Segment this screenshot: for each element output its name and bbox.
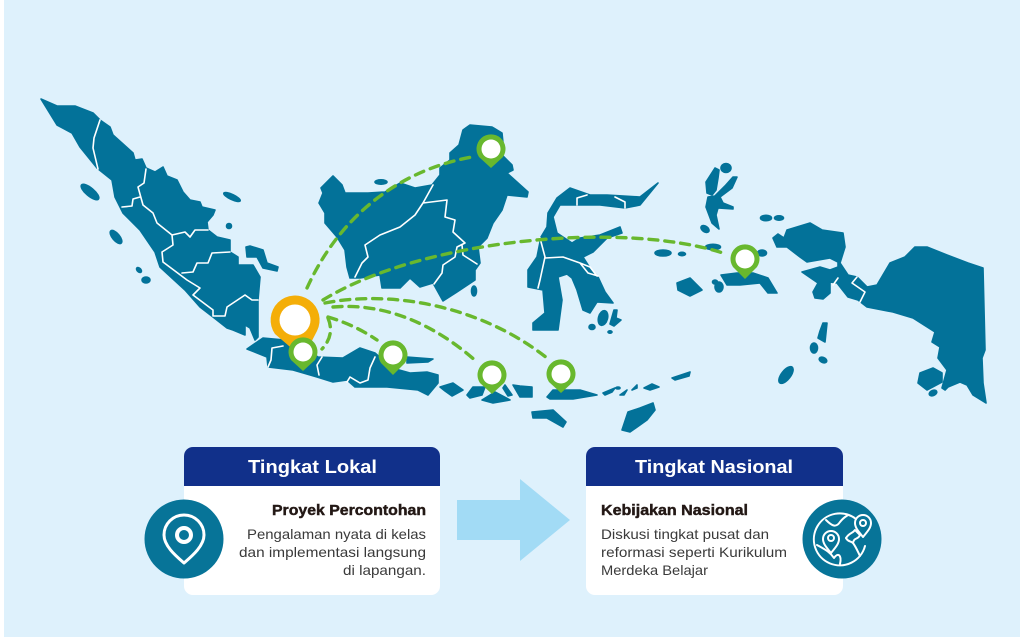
- panel: Tingkat Nasional: [586, 447, 882, 595]
- body text: Pengalaman nyata di kelas: [247, 526, 426, 542]
- pin: East Java: [378, 340, 408, 375]
- body text: Diskusi tingkat pusat dan: [601, 526, 769, 542]
- subheading: Proyek Percontohan: Proyek Percontohan: [272, 502, 426, 519]
- arrow: [457, 479, 570, 561]
- Sulawesi: [528, 183, 658, 333]
- Lesser Sunda Islands: [440, 372, 690, 432]
- subheading: Kebijakan Nasional: Kebijakan Nasional: [601, 502, 748, 519]
- connection lines: [307, 157, 723, 362]
- Java: [247, 338, 438, 395]
- main pin: origin: [271, 296, 320, 358]
- card header: [586, 447, 843, 486]
- heading: Tingkat Nasional: Tingkat Nasional: [635, 457, 793, 477]
- panel: Tingkat Lokal: [144, 447, 440, 595]
- Maluku: [655, 164, 784, 296]
- Kalimantan: [319, 125, 528, 301]
- body text: [239, 526, 426, 578]
- pin: North Kalimantan: [476, 134, 505, 168]
- body text: reformasi seperti Kurikulum: [601, 544, 787, 560]
- pin: Maluku: [730, 244, 760, 279]
- body text: Merdeka Belajar: [601, 562, 708, 578]
- map of Indonesia: [41, 99, 986, 432]
- icon: globe with pins: [802, 500, 882, 578]
- card body: [184, 447, 440, 595]
- body text: di lapangan.: [343, 562, 426, 578]
- pin: Lombok: [478, 360, 506, 394]
- pin: West Java: [288, 337, 318, 371]
- card body: [586, 447, 843, 595]
- icon: location pin: [144, 500, 224, 578]
- card header: [184, 447, 440, 486]
- Sumatra: [41, 99, 278, 340]
- pin: Flores: [546, 359, 576, 393]
- Papua: [773, 223, 986, 403]
- body text: dan implementasi langsung: [239, 544, 426, 560]
- body text: [601, 526, 787, 578]
- heading: Tingkat Lokal: Tingkat Lokal: [248, 457, 377, 477]
